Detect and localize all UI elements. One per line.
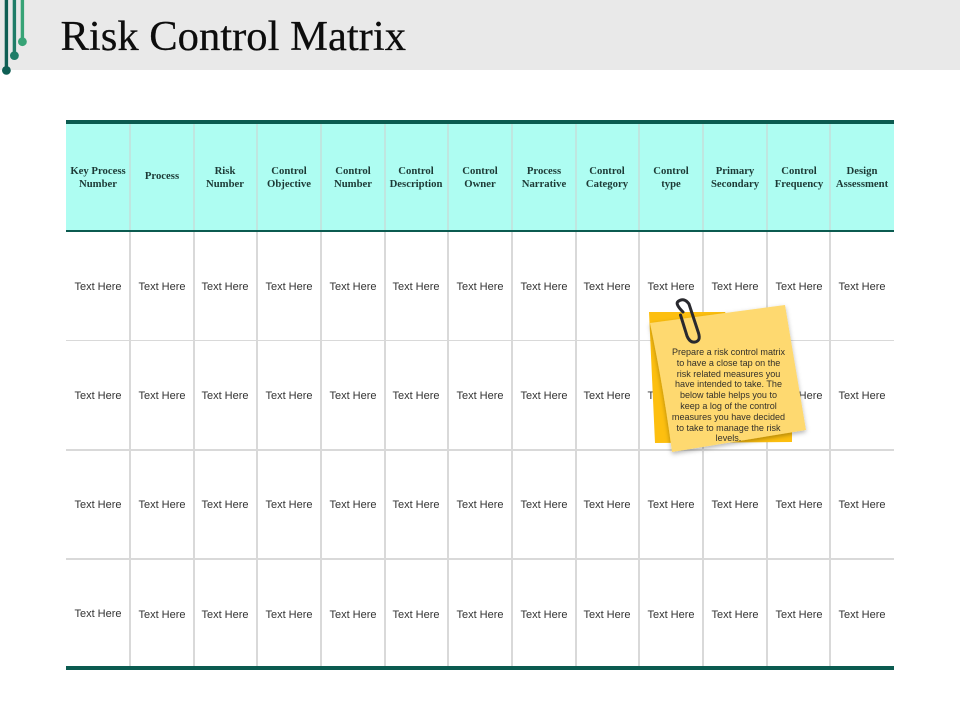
header: Control Description: Control <box>398 165 434 177</box>
table row 4: Text Here <box>456 609 504 621</box>
table row 4: Text Here <box>520 609 568 621</box>
callout text: below table helps you to <box>680 390 777 400</box>
table row 1: Text Here <box>138 281 186 293</box>
table row 2: Text Here <box>265 390 313 402</box>
risk control matrix table <box>66 120 894 670</box>
title band <box>0 0 960 70</box>
table row 4: Text Here <box>647 609 695 621</box>
header: Control Owner <box>462 165 498 190</box>
header: Design Assessment: Design <box>847 165 877 177</box>
header: Control Number <box>334 165 372 190</box>
table row 4: Text Here <box>265 609 313 621</box>
table row 3: Text Here <box>520 499 568 511</box>
table row 3: Text Here <box>138 499 186 511</box>
header: Primary Secondary: Secondary <box>711 178 759 190</box>
table row 1: Text Here <box>392 281 440 293</box>
callout text: to take to manage the risk <box>676 423 781 433</box>
header: Process: Process <box>145 170 179 182</box>
header background <box>66 123 894 231</box>
icon: sticky note sheets <box>648 304 808 456</box>
callout text: levels. <box>716 433 741 443</box>
header: Control Category: Control <box>589 165 625 177</box>
header: Control Category <box>586 165 628 190</box>
header: Control Frequency: Control <box>781 165 817 177</box>
header: Control Category: Category <box>586 178 628 190</box>
callout text: to have a close tap on the <box>677 358 780 368</box>
table row 3: Text Here <box>456 499 504 511</box>
header: Control Objective: Control <box>271 165 307 177</box>
table row 2: Text Here <box>647 390 695 402</box>
callout text: Prepare a risk control matrix <box>672 347 785 357</box>
table row 2: Text Here <box>392 390 440 402</box>
table row 2: Text Here <box>583 390 631 402</box>
table row 3: Text Here <box>775 499 823 511</box>
table row 3: Text Here <box>265 499 313 511</box>
table row 1: Text Here <box>838 281 886 293</box>
table row 1: Text Here <box>201 281 249 293</box>
table row 3: Text Here <box>838 499 886 511</box>
icon: hanging pins <box>2 0 27 75</box>
table row 1 <box>74 281 886 293</box>
table row 4: Text Here <box>138 609 186 621</box>
header: Control Frequency: Frequency <box>775 178 823 190</box>
header: Process Narrative: Process <box>527 165 561 177</box>
header: Control Number: Control <box>335 165 371 177</box>
header: Risk Number: Number <box>206 178 244 190</box>
table row 3: Text Here <box>329 499 377 511</box>
callout text <box>672 347 785 443</box>
header: Key Process Number: Key Process <box>70 165 126 177</box>
callout text: have intended to take. The <box>675 379 782 389</box>
callout text: risk related measures you <box>677 369 780 379</box>
table row 2: Text Here <box>138 390 186 402</box>
header: Control Description <box>390 165 442 190</box>
table row 1: Text Here <box>711 281 759 293</box>
table row 3: Text Here <box>74 499 122 511</box>
title: Risk Control Matrix <box>60 13 406 60</box>
header: Key Process Number <box>70 165 126 190</box>
table row 2: Text Here <box>838 390 886 402</box>
callout text: keep a log of the control <box>680 401 777 411</box>
header: Control type: type <box>661 178 681 190</box>
table row 3: Text Here <box>647 499 695 511</box>
header: Control Objective <box>267 165 311 190</box>
table row 4: Text Here <box>392 609 440 621</box>
table row 2 <box>74 390 886 402</box>
header: Key Process Number: Number <box>79 178 117 190</box>
table row 3: Text Here <box>583 499 631 511</box>
table row 4: Text Here <box>775 609 823 621</box>
table row 2: Text Here <box>201 390 249 402</box>
table row 2: Text Here <box>775 390 823 402</box>
icon: paperclip <box>676 298 701 344</box>
table row 4 <box>74 608 886 621</box>
header: Primary Secondary <box>711 165 759 190</box>
header: Control Objective: Objective <box>267 178 311 190</box>
table row 2: Text Here <box>520 390 568 402</box>
callout text: measures you have decided <box>672 412 785 422</box>
table row 4: Text Here <box>329 609 377 621</box>
header: Design Assessment: Assessment <box>836 178 888 190</box>
table row 1: Text Here <box>775 281 823 293</box>
table row 4: Text Here <box>583 609 631 621</box>
table row 3: Text Here <box>392 499 440 511</box>
table row 2: Text Here <box>711 390 759 402</box>
table row 3: Text Here <box>201 499 249 511</box>
table row 2: Text Here <box>74 390 122 402</box>
table row 3 <box>74 499 886 511</box>
table row 1: Text Here <box>583 281 631 293</box>
table row 1: Text Here <box>520 281 568 293</box>
table row 1: Text Here <box>74 281 122 293</box>
header: Control type <box>653 165 689 190</box>
header: Control type: Control <box>653 165 689 177</box>
table row 1: Text Here <box>456 281 504 293</box>
table row 1: Text Here <box>265 281 313 293</box>
table row 2: Text Here <box>456 390 504 402</box>
header: Control Frequency <box>774 165 824 190</box>
header: Risk Number: Risk <box>215 165 235 177</box>
table row 4: Text Here <box>711 609 759 621</box>
header: Process Narrative <box>522 165 566 190</box>
table row 4: Text Here <box>838 609 886 621</box>
header: Control Number: Number <box>334 178 372 190</box>
table row 4: Text Here <box>74 608 122 620</box>
sticky note callout <box>648 298 808 456</box>
header: Control Description: Description <box>390 178 442 190</box>
header: Process Narrative: Narrative <box>522 178 566 190</box>
table row 2: Text Here <box>329 390 377 402</box>
table row 3: Text Here <box>711 499 759 511</box>
header: Control Owner: Control <box>462 165 498 177</box>
table row 1: Text Here <box>647 281 695 293</box>
table header row <box>70 165 888 190</box>
table row 4: Text Here <box>201 609 249 621</box>
header: Design Assessment <box>836 165 888 190</box>
table row 1: Text Here <box>329 281 377 293</box>
header: Risk Number <box>206 165 244 190</box>
header: Primary Secondary: Primary <box>716 165 754 177</box>
header: Control Owner: Owner <box>464 178 496 190</box>
